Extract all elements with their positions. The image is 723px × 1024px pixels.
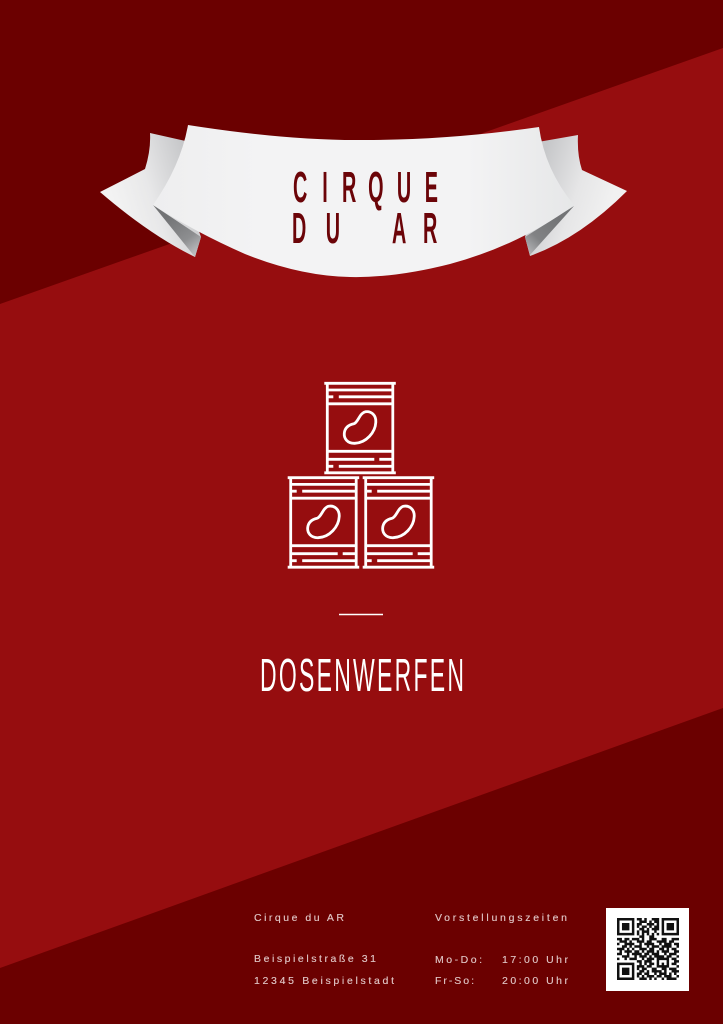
address city: 12345 Beispielstadt bbox=[254, 975, 394, 987]
QR code bbox=[606, 908, 689, 991]
icon: bottom left can bbox=[288, 478, 359, 567]
times weekend label: Fr-So: bbox=[435, 975, 474, 987]
ribbon: right fold bbox=[525, 206, 574, 255]
icon: bottom right can bbox=[363, 478, 434, 567]
ribbon: left fold bbox=[153, 205, 201, 257]
ribbon: right tail bbox=[525, 135, 627, 256]
times weekend value: 20:00 Uhr bbox=[502, 975, 568, 987]
title line 2: DUAR bbox=[292, 204, 437, 253]
footer: address bbox=[254, 912, 394, 987]
icon: stacked bean cans bbox=[288, 383, 434, 567]
background: dark top wedge bbox=[0, 0, 723, 304]
ribbon banner bbox=[100, 125, 627, 277]
times weekdays value: 17:00 Uhr bbox=[502, 954, 568, 966]
ribbon: left tail bbox=[100, 133, 201, 257]
QR background bbox=[606, 908, 689, 991]
ribbon: main band bbox=[153, 125, 574, 277]
divider bbox=[339, 614, 383, 616]
title line 1: CIRQUE bbox=[293, 163, 438, 212]
footer: show times bbox=[435, 912, 568, 987]
times heading: Vorstellungszeiten bbox=[435, 912, 567, 924]
address street: Beispielstraße 31 bbox=[254, 953, 376, 965]
background: dark bottom wedge bbox=[0, 708, 723, 1024]
QR modules bbox=[617, 919, 679, 979]
heading: Dosenwerfen: DOSENWERFEN bbox=[260, 649, 464, 701]
icon: top can bbox=[324, 383, 396, 473]
address name: Cirque du AR bbox=[254, 912, 344, 924]
times weekdays label: Mo-Do: bbox=[435, 954, 482, 966]
